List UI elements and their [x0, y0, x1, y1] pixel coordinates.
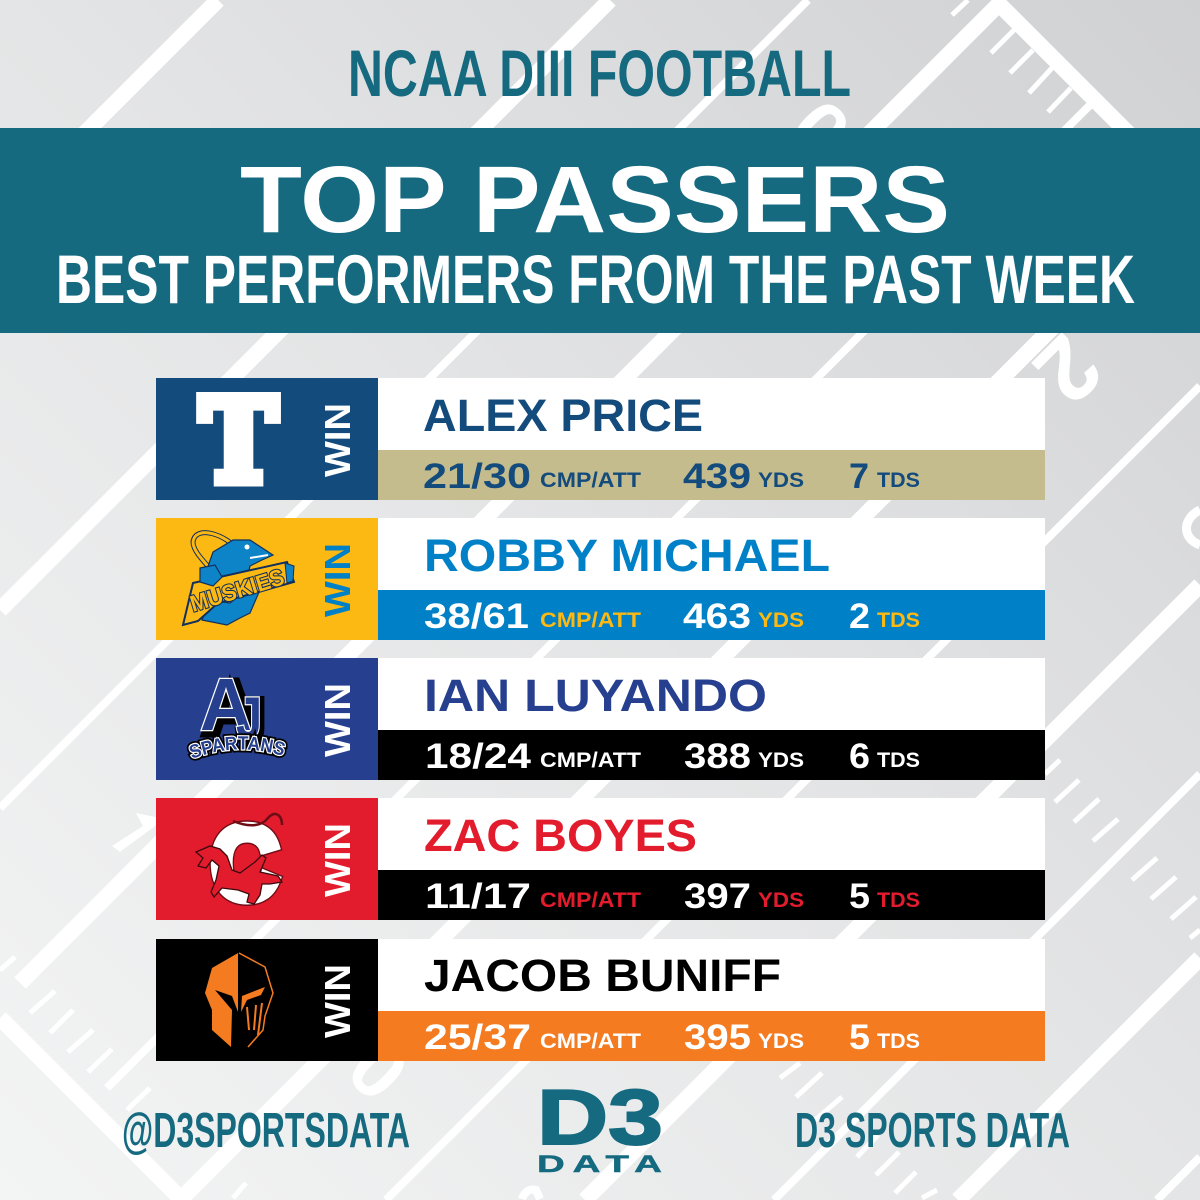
stats: TDS: [877, 889, 920, 912]
panel: Zac Boyes: [156, 798, 1045, 922]
player name: ALEX PRICE: [423, 390, 703, 441]
icon: AJ Spartans logo: SPARTANS: [188, 734, 286, 759]
icon: T logo: T: [200, 374, 277, 508]
player name: JACOB BUNIFF: [424, 950, 781, 1001]
result: win: WIN: [317, 823, 358, 897]
stats: 21/30: [423, 457, 531, 496]
stats: 397: [684, 877, 751, 916]
result: win: WIN: [317, 683, 358, 757]
stats: [424, 1018, 920, 1057]
icon: C dragon logo: C: [211, 806, 279, 922]
background: football field: 0: [773, 83, 867, 177]
stats: TDS: [877, 609, 920, 632]
stats: 463: [683, 597, 751, 636]
panel: Robby Michael: [156, 518, 1045, 640]
icon: D3 Data logo: [537, 1073, 663, 1177]
icon: D3 Data logo: D3: [537, 1073, 663, 1161]
stats: YDS: [758, 609, 804, 632]
stats: YDS: [758, 749, 804, 772]
stats: [425, 737, 920, 776]
stats: YDS: [758, 889, 804, 912]
stats: YDS: [758, 469, 804, 492]
banner: [0, 128, 1200, 333]
result: win: WIN: [317, 964, 358, 1038]
result: win: WIN: [317, 543, 358, 617]
stats: CMP/ATT: [540, 749, 641, 772]
panel: Alex Price: [156, 374, 1045, 508]
icon: D3 Data logo: DATA: [537, 1150, 662, 1177]
footer handle: @D3SPORTSDATA: [122, 1104, 410, 1158]
stats: TDS: [877, 1030, 920, 1053]
player name: ROBBY MICHAEL: [424, 530, 830, 581]
stats: CMP/ATT: [540, 1030, 641, 1053]
stats: [425, 877, 920, 916]
background: football field: 2: [1014, 316, 1121, 422]
stats: 388: [684, 737, 751, 776]
icon: Muskies logo: [183, 533, 294, 625]
stats: [423, 457, 920, 496]
stats: 439: [683, 457, 751, 496]
stats: 2: [849, 597, 870, 636]
player name: ZAC BOYES: [424, 810, 697, 861]
stats: 5: [849, 1018, 870, 1057]
stats: 18/24: [425, 737, 532, 776]
player name: IAN LUYANDO: [424, 670, 767, 721]
icon: AJ Spartans logo: A: [204, 666, 256, 749]
stats: 5: [849, 877, 870, 916]
stats: 6: [849, 737, 870, 776]
stats: CMP/ATT: [540, 889, 641, 912]
result: win: WIN: [317, 403, 358, 477]
icon: Muskies logo: MUSKIES: [187, 564, 287, 617]
icon: AJ Spartans logo: [186, 663, 288, 761]
icon: C dragon logo: C: [211, 806, 279, 922]
stats: 38/61: [424, 597, 529, 636]
background: football field: 0: [331, 1023, 425, 1117]
stats: 11/17: [425, 877, 531, 916]
panel: Ian Luyando: [156, 658, 1045, 780]
stats: TDS: [877, 749, 920, 772]
stats: YDS: [758, 1030, 804, 1053]
icon: AJ Spartans logo: A: [200, 663, 252, 746]
stats: CMP/ATT: [540, 609, 641, 632]
stats: 7: [849, 457, 869, 496]
panel: Jacob Buniff: [156, 939, 1045, 1061]
icon: AJ Spartans logo: J: [238, 689, 264, 754]
icon: AJ Spartans logo: J: [236, 686, 262, 751]
stats: CMP/ATT: [540, 469, 641, 492]
icon: Spartan helmet logo: [205, 953, 273, 1047]
banner heading: TOP PASSERS: [240, 147, 950, 253]
stats: 25/37: [424, 1018, 531, 1057]
stats: [424, 597, 920, 636]
title: NCAA DIII FOOTBALL: [348, 36, 851, 110]
stats: TDS: [877, 469, 920, 492]
icon: AJ Spartans logo: SPARTANS: [186, 728, 288, 761]
stats: 395: [684, 1018, 751, 1057]
